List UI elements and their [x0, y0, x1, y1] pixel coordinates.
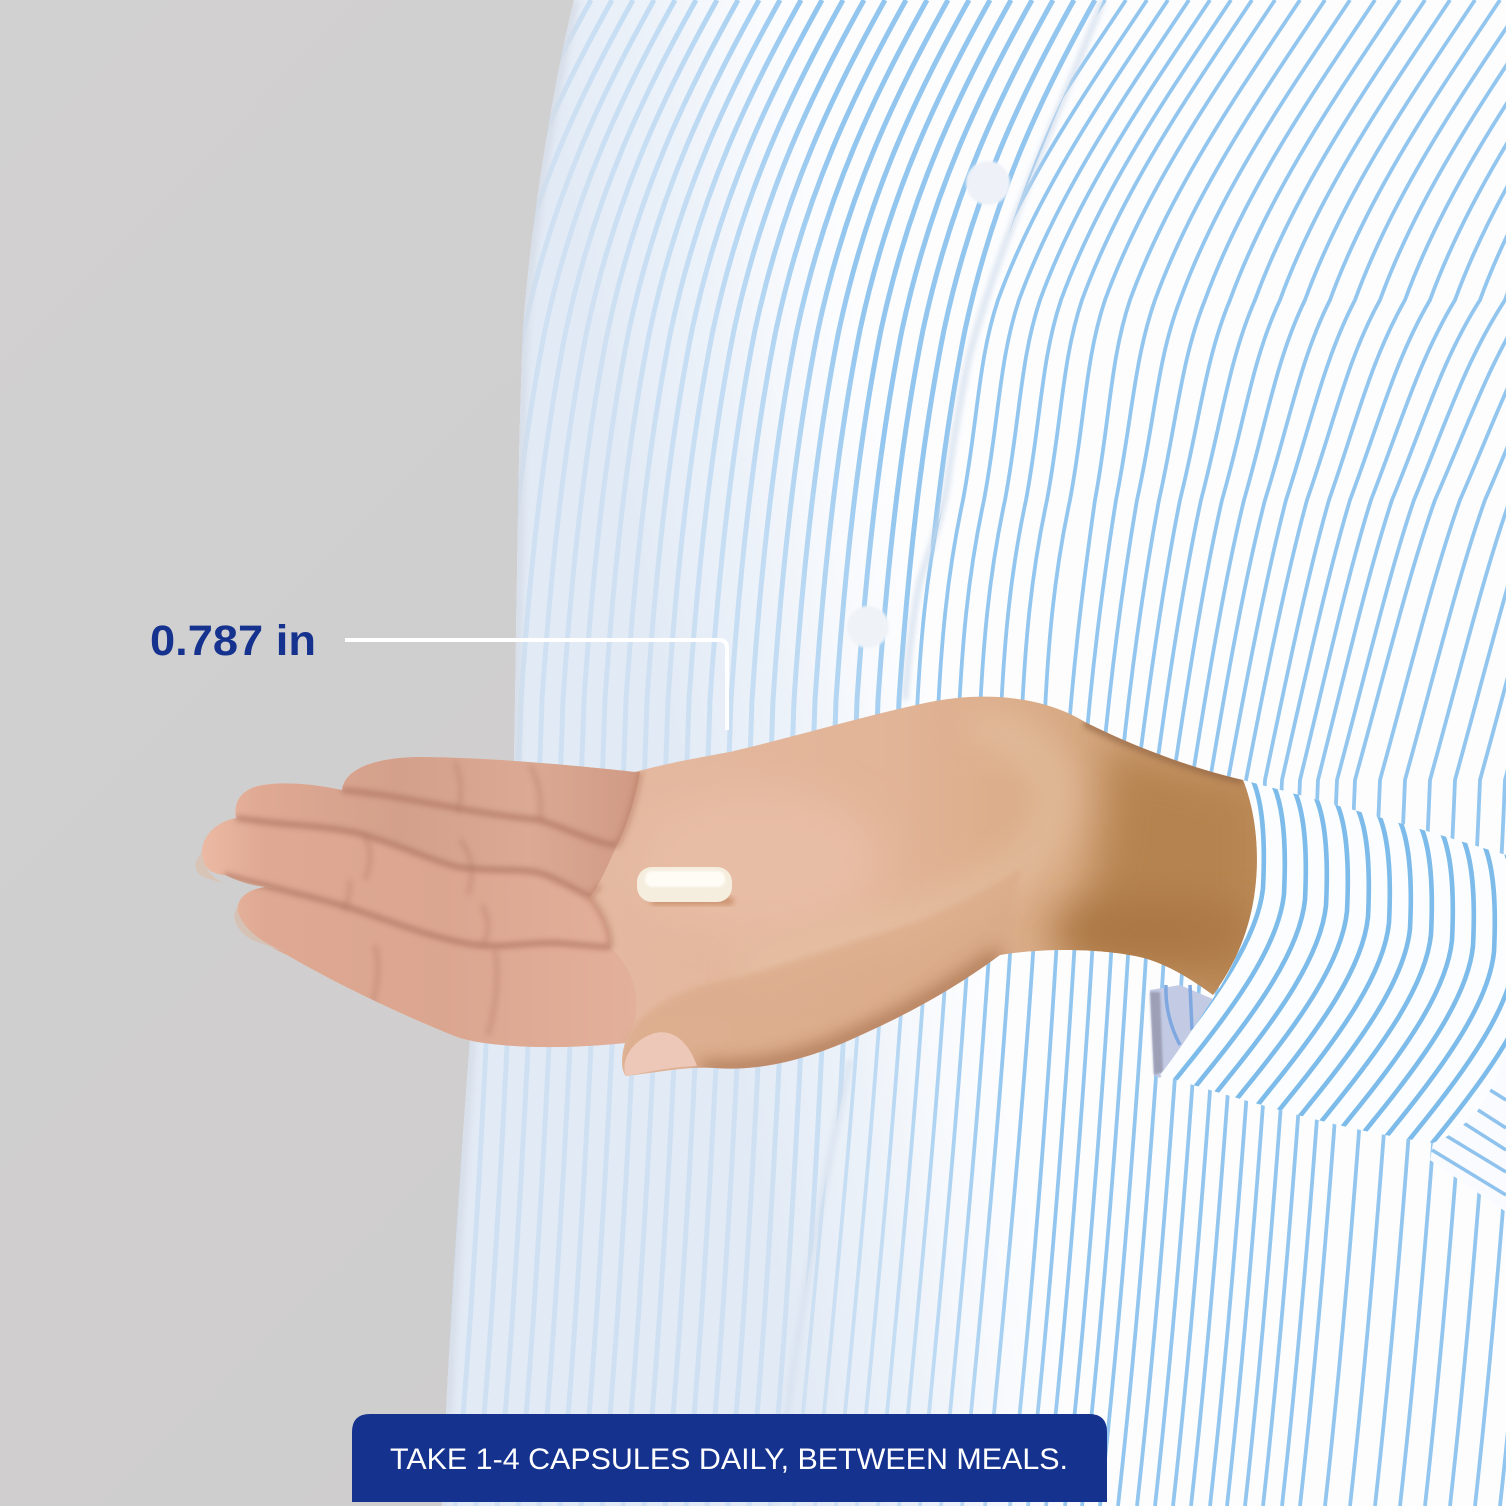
- hand: [190, 680, 1270, 1090]
- little finger: [237, 887, 636, 1047]
- ring finger: [202, 818, 610, 947]
- out of focus left side of shirt: [442, 0, 1067, 1506]
- finger to palm shadow: [590, 772, 640, 947]
- sleeve beyond cuff: [1430, 1088, 1506, 1212]
- index finger: [342, 757, 640, 845]
- shirt left panel stripes: [448, 0, 1098, 1506]
- cuff stripes: [1173, 782, 1506, 1143]
- gap dark edge: [1150, 992, 1163, 1075]
- thumb ridge highlight: [904, 717, 1082, 922]
- dosage banner: [352, 1414, 1107, 1502]
- hand top edge shadow: [1085, 722, 1243, 780]
- shirt cuff: [1131, 768, 1506, 1215]
- dosage text: TAKE 1-4 CAPSULES DAILY, BETWEEN MEALS.: [390, 1443, 1068, 1476]
- capsule shadow: [650, 897, 734, 905]
- ring fingernail: [196, 852, 232, 886]
- wrist shadow: [1060, 745, 1260, 1000]
- gap under cuff: [1150, 985, 1215, 1078]
- thumb: [622, 867, 1022, 1076]
- shirt button lower: [847, 606, 889, 648]
- measurement callout line: [345, 640, 727, 730]
- bending shoulder stripes: [1010, 0, 1506, 1506]
- striped shirt: [442, 0, 1506, 1506]
- little fingernail: [234, 908, 285, 952]
- finger crease shadows: [225, 790, 617, 947]
- palm base: [190, 680, 1270, 1090]
- palm highlight: [719, 806, 870, 914]
- placket crease: [905, 0, 1103, 700]
- capsule body highlight: [645, 871, 725, 887]
- thumbnail: [624, 1032, 697, 1076]
- shirt right panel stripes: [792, 0, 1506, 1506]
- middle finger: [235, 783, 617, 897]
- thumb lower shadow: [700, 955, 1000, 1070]
- capsule: [637, 867, 734, 905]
- measurement label: 0.787 in: [150, 617, 316, 665]
- gap stripes: [1166, 985, 1192, 1045]
- lower placket crease: [797, 1060, 852, 1339]
- finger joint creases: [345, 762, 541, 1035]
- soft shirt edge: [442, 0, 574, 1506]
- shirt button upper: [966, 161, 1010, 205]
- lower wrist warm shadow: [1050, 900, 1250, 960]
